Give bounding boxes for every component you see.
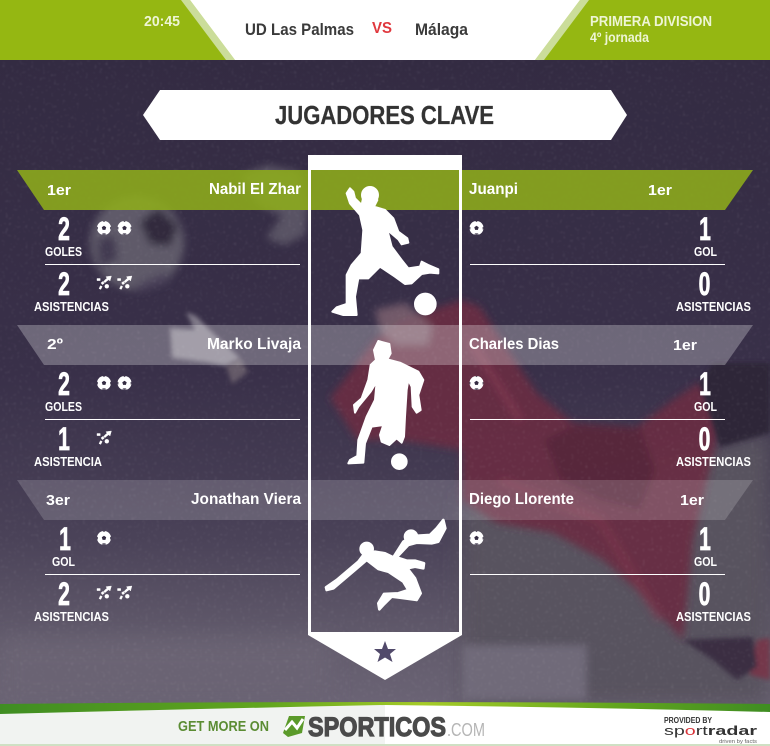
assists number: 0 (699, 575, 710, 612)
player name: Jonathan Viera (191, 491, 301, 508)
assists label: ASISTENCIAS (34, 300, 109, 314)
player name: Nabil El Zhar (209, 181, 301, 198)
.com: .COM (447, 720, 485, 740)
icon: player volley (326, 520, 445, 609)
assists number: 1 (58, 420, 70, 457)
goals number: 2 (58, 365, 70, 402)
goal icons (97, 376, 132, 390)
center frame (308, 155, 462, 680)
kickoff time: 20:45 (144, 13, 180, 30)
provided by: PROVIDED BY (664, 716, 713, 725)
assists number: 0 (699, 265, 710, 302)
header bar (0, 0, 770, 60)
assists label: ASISTENCIAS (34, 610, 109, 624)
icon: player dribbling (348, 341, 423, 469)
rank: 1er (47, 182, 71, 199)
goalkeeper shoe (683, 637, 770, 680)
assists label: ASISTENCIAS (676, 300, 751, 314)
goalkeeper dark glove (700, 363, 770, 447)
goals number: 2 (58, 210, 70, 247)
goalkeeper gloves (170, 165, 308, 384)
assists number: 2 (58, 265, 70, 302)
goals label: GOL (694, 400, 717, 414)
row 2 right: Charles Dias (469, 336, 751, 469)
sportradar wordmark: sp o rt radar (664, 723, 757, 738)
footer (0, 702, 770, 746)
title banner (143, 90, 627, 140)
row 1 left: Nabil El Zhar (34, 181, 301, 314)
rank: 1er (648, 182, 672, 199)
get more on: GET MORE ON (178, 719, 269, 735)
row 1 right: Juanpi (469, 181, 751, 314)
player name: Diego Llorente (469, 491, 574, 508)
player name: Marko Livaja (207, 336, 301, 353)
rank: 1er (673, 337, 697, 354)
matchday: 4º jornada (590, 30, 649, 45)
goals label: GOLES (45, 245, 82, 259)
home team: UD Las Palmas (245, 21, 354, 39)
goals number: 1 (699, 365, 711, 402)
goal icon (470, 376, 484, 390)
driven by: driven by facts (719, 739, 758, 745)
row 3 right: Diego Llorente (469, 491, 751, 624)
goals label: GOL (694, 555, 717, 569)
goals number: 1 (59, 520, 71, 557)
icon: player shooting (332, 187, 438, 315)
title: JUGADORES CLAVE (275, 100, 494, 130)
assist icon (97, 431, 111, 444)
goals number: 1 (699, 210, 711, 247)
goals number: 1 (699, 520, 711, 557)
ground (462, 430, 770, 705)
player name: Juanpi (469, 181, 518, 198)
assist icons (97, 586, 132, 599)
goals label: GOL (694, 245, 717, 259)
goals label: GOL (52, 555, 75, 569)
icon: star (374, 641, 396, 662)
assist icons (97, 276, 132, 289)
versus: VS (372, 20, 392, 37)
soccer ball in photo (90, 196, 184, 292)
player bands (17, 170, 753, 520)
rank: 3er (46, 492, 70, 509)
rank: 2º (47, 336, 64, 353)
player name: Charles Dias (469, 336, 559, 353)
assists label: ASISTENCIAS (676, 610, 751, 624)
away team: Málaga (415, 21, 469, 39)
row 3 left: Jonathan Viera (34, 491, 301, 624)
goal icon (470, 221, 484, 235)
goal icons (97, 221, 132, 235)
assists label: ASISTENCIA (34, 455, 102, 469)
row 2 left: Marko Livaja (34, 336, 301, 469)
rank: 1er (680, 492, 704, 509)
assists number: 2 (58, 575, 70, 612)
goal icon (470, 531, 484, 545)
goalkeeper jersey (330, 300, 720, 640)
competition: PRIMERA DIVISION (590, 13, 712, 30)
goal icon (97, 531, 111, 545)
assists number: 0 (699, 420, 710, 457)
sporticos wordmark: SPORTICOS (308, 712, 446, 742)
assists label: ASISTENCIAS (676, 455, 751, 469)
icon: sporticos logo (283, 716, 305, 737)
goals label: GOLES (45, 400, 82, 414)
